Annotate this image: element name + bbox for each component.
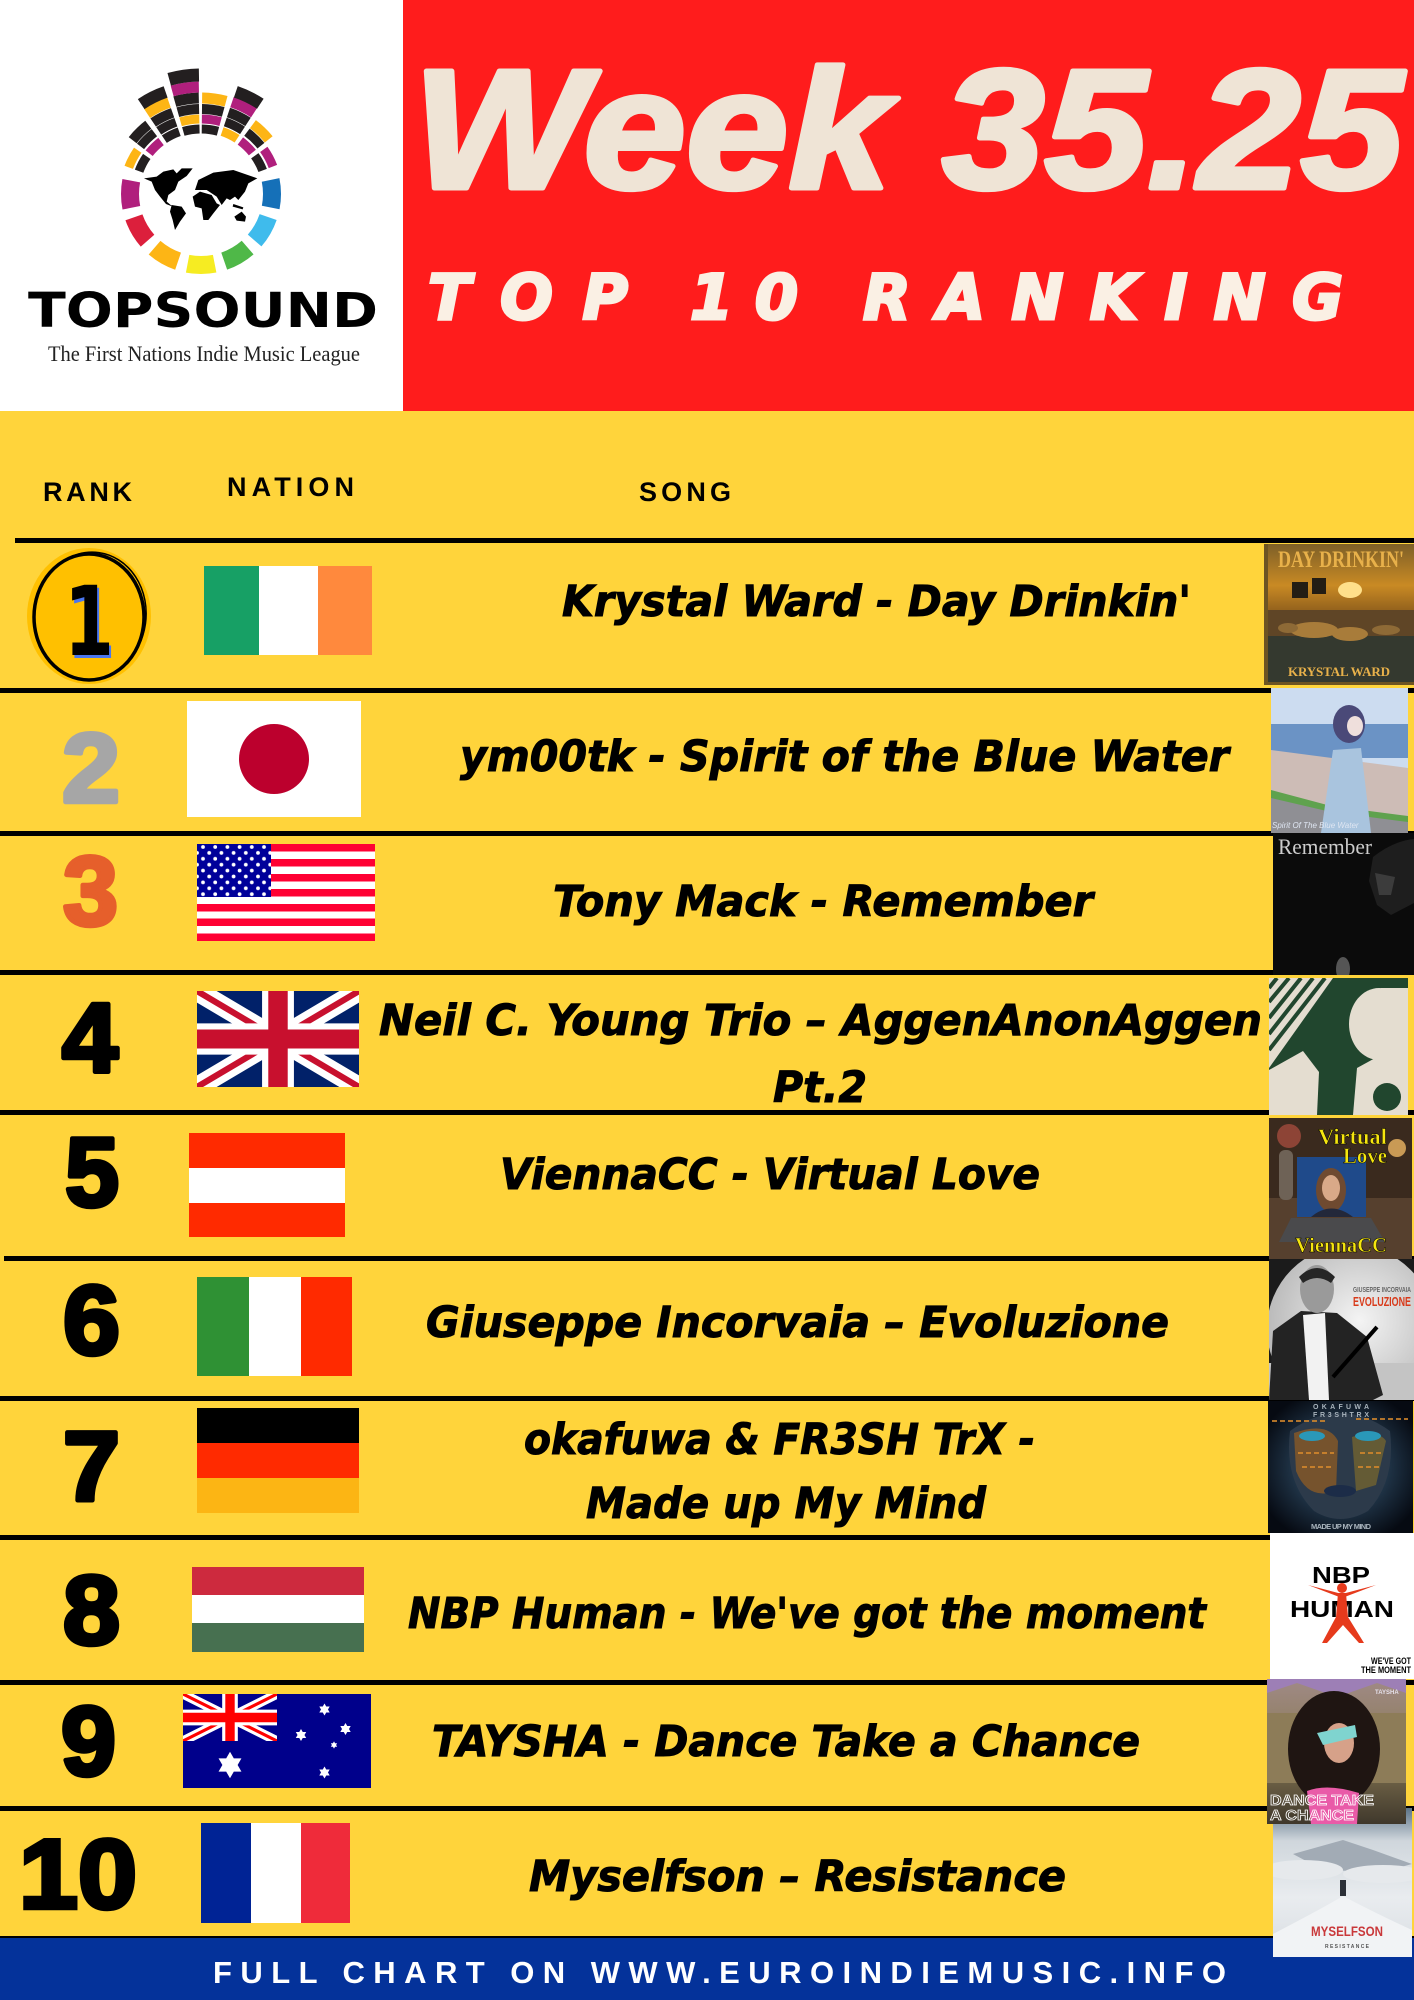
row 7: song: Made up My Mind [586, 1480, 987, 1529]
album cover 4: AggenAnonAggen [1269, 978, 1408, 1115]
panel: logo [0, 0, 403, 411]
row 10: song: Myselfson – Resistance [529, 1853, 1066, 1902]
album cover 3: Remember [1273, 833, 1414, 975]
subtitle: RANKING [863, 261, 1343, 334]
icon: world map [144, 168, 257, 230]
row 4: song: Neil C. Young Trio – AggenAnonAggen [379, 997, 1262, 1046]
album cover 5: Virtual Love: Love [1343, 1143, 1387, 1168]
table header labels: NATION [227, 472, 354, 502]
subtitle: 10 [690, 261, 798, 334]
table header labels [43, 472, 731, 507]
album cover 7: Made up My Mind [1268, 1401, 1413, 1533]
row 3: song: Tony Mack - Remember [553, 878, 1096, 927]
row 8: song: NBP Human - We've got the moment [408, 1590, 1208, 1639]
album cover 8: We've got the moment [1270, 1533, 1414, 1679]
row 7: song [524, 1416, 1035, 1529]
row 1: rank badge: 1 [64, 566, 114, 678]
row 3: rank: 3 [63, 836, 118, 946]
album cover 7: Made up My Mind: OKAFUWA [1313, 1404, 1369, 1411]
row 5: flag Austria [189, 1133, 345, 1237]
row 9: rank: 9 [61, 1686, 116, 1796]
album cover 10: Resistance: MYSELFSON [1311, 1923, 1383, 1939]
row 10: rank: 10 [19, 1819, 137, 1929]
album cover 1: Day Drinkin' [1264, 544, 1414, 685]
row 6: rank: 6 [63, 1265, 120, 1375]
album cover 5: Virtual Love: ViennaCC [1295, 1233, 1387, 1257]
panel: header [0, 0, 1414, 411]
row 9: flag Australia [183, 1694, 371, 1788]
logo tagline: The First Nations Indie Music League [48, 341, 360, 366]
row 8: flag Hungary [192, 1567, 364, 1652]
album cover 2: Spirit of the Blue Water [1271, 688, 1408, 833]
row 6: flag Italy [197, 1277, 352, 1376]
row 2: song: ym00tk - Spirit of the Blue Water [460, 733, 1232, 782]
panel: title banner [403, 0, 1414, 411]
row 5: rank: 5 [65, 1117, 119, 1227]
row 4: song [379, 997, 1262, 1113]
row 1: flag Ireland [204, 566, 372, 655]
album cover 9: Dance Take a Chance: TAYSHA [1375, 1690, 1399, 1696]
icon: coloured ring [130, 123, 272, 265]
row 4: flag UK [197, 991, 359, 1087]
footer text: FULL CHART ON WWW.EUROINDIEMUSIC.INFO [213, 1955, 1226, 1990]
row 9: song: TAYSHA - Dance Take a Chance [432, 1718, 1140, 1767]
album cover 8: We've got the moment: HUMAN [1290, 1596, 1394, 1622]
row 1: rank badge [26, 545, 154, 687]
album cover 3: Remember: Remember [1278, 834, 1373, 859]
row 5: song: ViennaCC - Virtual Love [500, 1151, 1040, 1200]
row 4: song: Pt.2 [773, 1064, 867, 1113]
album cover 8: We've got the moment: NBP [1312, 1562, 1370, 1588]
subtitle [428, 261, 1343, 334]
row 4: rank: 4 [62, 983, 118, 1093]
album cover 9: Dance Take a Chance: DANCE TAKE [1270, 1792, 1374, 1809]
footer bar [0, 1938, 1414, 2000]
row 2: flag Japan [187, 701, 361, 817]
table header labels: SONG [639, 477, 731, 507]
album cover 1: Day Drinkin': KRYSTAL WARD [1288, 664, 1390, 679]
title: Week 35.25 [413, 35, 1406, 225]
row 7: song: okafuwa & FR3SH TrX - [524, 1416, 1035, 1465]
row 6: song: Giuseppe Incorvaia – Evoluzione [426, 1299, 1169, 1348]
row 7: rank: 7 [63, 1411, 120, 1521]
album cover 6: Evoluzione [1269, 1259, 1414, 1400]
row 7: flag Germany [197, 1408, 359, 1513]
table header labels: RANK [43, 477, 132, 507]
album cover 2: Spirit of the Blue Water: Spirit Of The Blue Water [1272, 821, 1359, 830]
row 3: flag USA [197, 844, 375, 941]
album cover 5: Virtual Love: Virtual [1318, 1124, 1387, 1149]
subtitle: TOP [428, 261, 628, 334]
album cover 10: Resistance [1273, 1808, 1412, 1957]
row 1: song: Krystal Ward - Day Drinkin' [562, 578, 1191, 627]
album cover 9: Dance Take a Chance: A CHANCE [1270, 1807, 1354, 1824]
album cover 5: Virtual Love [1269, 1118, 1412, 1259]
row 1: rank badge: 1 [66, 569, 116, 681]
row 10: flag France [201, 1823, 350, 1923]
album cover 7: Made up My Mind: FR3SHTRX [1313, 1412, 1369, 1419]
logo wordmark: TOPSOUND [28, 283, 378, 339]
album cover 7: Made up My Mind: MADE UP MY MIND [1311, 1522, 1372, 1531]
album cover 9: Dance Take a Chance [1267, 1679, 1406, 1824]
icon: equalizer arcs [82, 75, 320, 313]
album cover 10: Resistance: RESISTANCE [1325, 1944, 1370, 1950]
row 2: rank: 2 [62, 713, 120, 823]
row 8: rank: 8 [63, 1555, 120, 1665]
